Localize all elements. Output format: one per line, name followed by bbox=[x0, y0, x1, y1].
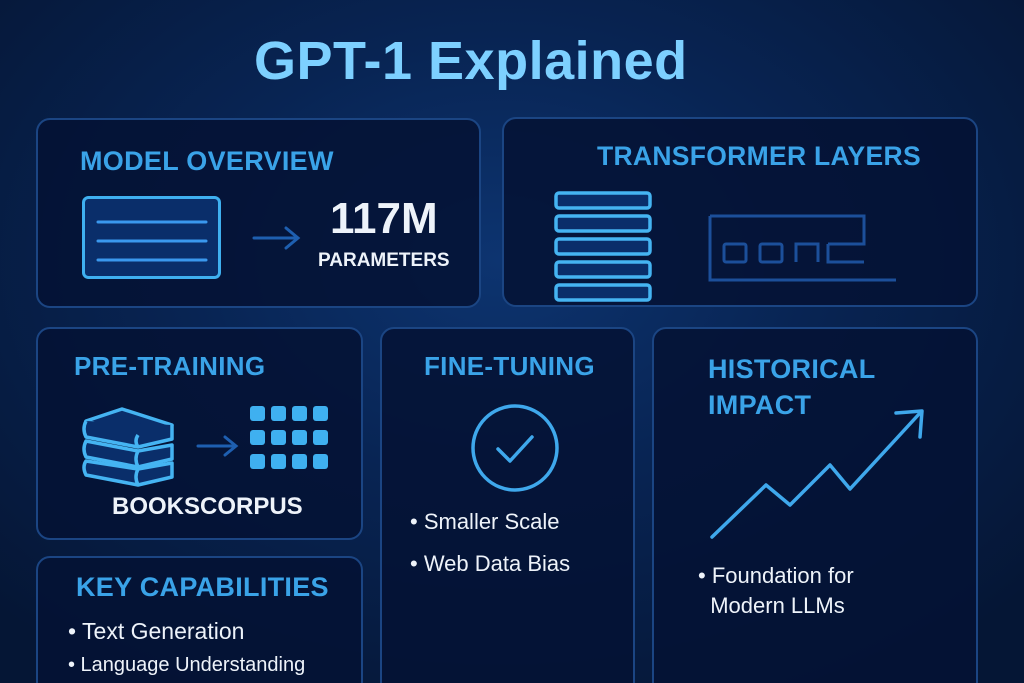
icon: check circle bbox=[471, 404, 559, 492]
text: foundation: Modern LLMs bbox=[710, 593, 845, 618]
panel: pre-training bbox=[36, 327, 363, 540]
list: limitations: • Web Data Bias bbox=[410, 551, 570, 576]
icon: attention block bbox=[708, 214, 896, 282]
stat: 117M parameters bbox=[318, 194, 450, 271]
chart: growth line bbox=[710, 409, 924, 539]
panel: model overview bbox=[36, 118, 481, 308]
text: foundation: • Foundation for bbox=[698, 563, 854, 588]
heading: key capabilities: KEY CAPABILITIES bbox=[76, 572, 329, 602]
heading: transformer layers: TRANSFORMER LAYERS bbox=[597, 141, 921, 171]
icon: document bbox=[82, 196, 221, 279]
heading: historical impact bbox=[708, 354, 876, 420]
heading: pre-training: PRE-TRAINING bbox=[74, 351, 265, 381]
arrow bbox=[196, 435, 238, 457]
stat: 117M parameters: 117M bbox=[330, 194, 438, 243]
heading: historical impact: IMPACT bbox=[708, 390, 811, 420]
heading: historical impact: HISTORICAL bbox=[708, 354, 876, 384]
icon: layer stack bbox=[554, 191, 652, 302]
list: limitations bbox=[410, 509, 570, 576]
icon: books bbox=[82, 407, 174, 487]
list: limitations: • Smaller Scale bbox=[410, 509, 560, 534]
panel: fine-tuning bbox=[380, 327, 635, 683]
heading: model overview: MODEL OVERVIEW bbox=[80, 146, 334, 176]
panel: key capabilities bbox=[36, 556, 363, 683]
list: capabilities: • Language Understanding bbox=[68, 654, 305, 676]
title: GPT-1 Explained bbox=[254, 31, 688, 91]
arrow bbox=[252, 226, 300, 250]
label: bookscorpus: BOOKSCORPUS bbox=[112, 493, 303, 520]
panel: historical impact bbox=[652, 327, 978, 683]
heading: fine-tuning: FINE-TUNING bbox=[424, 351, 595, 381]
text: foundation bbox=[698, 563, 854, 618]
list: capabilities: • Text Generation bbox=[68, 618, 244, 644]
panel: transformer layers bbox=[502, 117, 978, 307]
list: capabilities bbox=[68, 618, 305, 676]
icon: token grid bbox=[250, 406, 328, 469]
stat: 117M parameters: PARAMETERS bbox=[318, 250, 450, 271]
